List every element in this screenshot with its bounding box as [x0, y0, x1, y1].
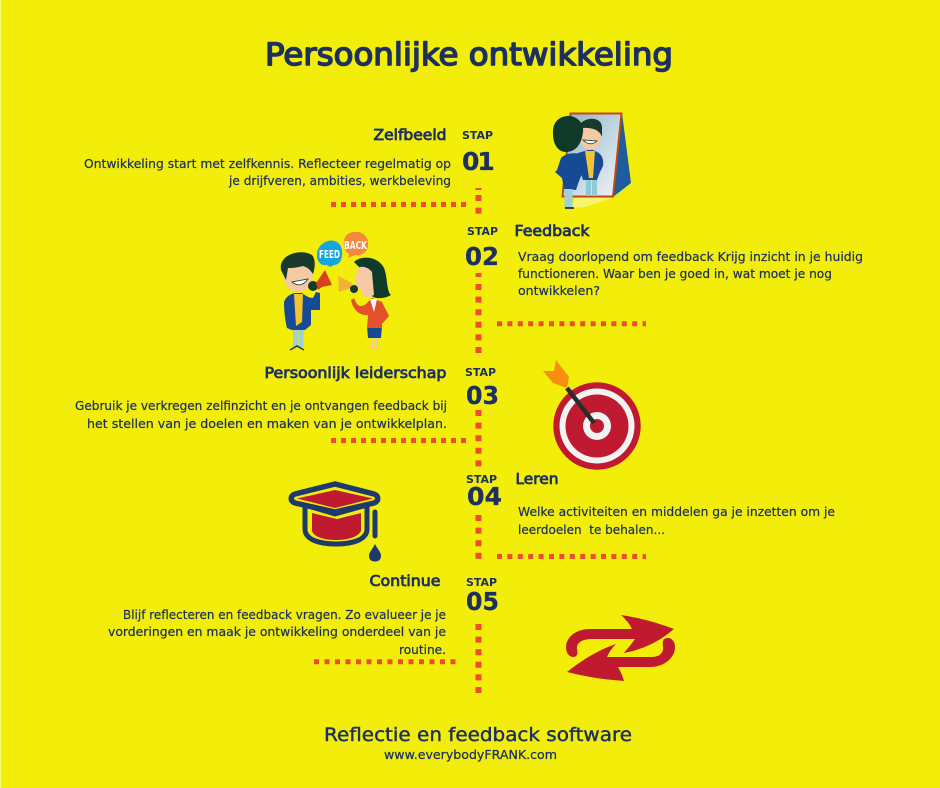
speech bubble: back: BACK	[344, 239, 367, 252]
step 4 connector	[497, 554, 646, 559]
step 1	[84, 126, 495, 204]
step 5 description: Blijf reflecteren en feedback vragen. Zo evalueer je je	[123, 608, 446, 623]
step 3 description	[75, 399, 447, 432]
step 3 description: het stellen van je doelen en maken van je ontwikkelplan.	[87, 417, 447, 432]
step 2 heading: Feedback	[514, 222, 590, 240]
step 1 label: STAP	[462, 129, 493, 142]
step 1 description: je drijfveren, ambities, werkbeleving	[228, 174, 451, 189]
icon: man at mirror	[553, 113, 631, 209]
step 4 heading: Leren	[516, 470, 558, 488]
footer tagline: Reflectie en feedback software	[324, 724, 632, 746]
step 3 label: STAP	[465, 366, 496, 379]
vertical timeline	[476, 188, 482, 694]
step 5 description: vorderingen en maak je ontwikkeling onderdeel van je	[108, 625, 446, 640]
step 2 description: Vraag doorlopend om feedback Krijg inzicht in je huidig	[518, 250, 863, 265]
step 2 description: ontwikkelen?	[518, 284, 600, 299]
title: Persoonlijke ontwikkeling	[265, 37, 673, 73]
step 4 description	[518, 505, 835, 538]
man	[281, 252, 332, 350]
woman	[338, 258, 391, 350]
step 4 description: Welke activiteiten en middelen ga je inzetten om je	[518, 505, 835, 520]
step 5 connector	[314, 659, 456, 664]
step 5	[108, 572, 499, 662]
step 3 heading: Persoonlijk leiderschap	[264, 364, 446, 382]
icon: two people with megaphones and speech bubbles	[281, 232, 391, 350]
step 1 number: 01	[462, 147, 495, 176]
step 3 connector	[331, 438, 466, 443]
step 2 description	[518, 250, 863, 299]
step 3 number: 03	[466, 381, 499, 410]
step 4 description: leerdoelen te behalen...	[518, 523, 665, 538]
step 1 heading: Zelfbeeld	[374, 126, 446, 144]
step 2 connector	[497, 321, 646, 326]
step 4 label: STAP	[466, 473, 497, 486]
step 1 description	[84, 157, 451, 189]
step 5 number: 05	[466, 587, 499, 616]
step 4 number: 04	[467, 482, 502, 511]
step 5 heading: Continue	[370, 572, 440, 590]
step 3 description: Gebruik je verkregen zelfinzicht en je ontvangen feedback bij	[75, 399, 447, 414]
footer website: www.everybodyFRANK.com	[384, 748, 557, 762]
step 1 connector	[331, 202, 466, 207]
icon: looping arrows	[566, 615, 675, 681]
step 4	[466, 470, 835, 556]
step 3	[75, 364, 499, 440]
icon: target with arrow	[543, 360, 641, 470]
step 2 description: functioneren. Waar ben je goed in, wat moet je nog	[518, 267, 832, 282]
step 5 description	[108, 608, 446, 658]
step 1 description: Ontwikkeling start met zelfkennis. Reflecteer regelmatig op	[84, 157, 451, 172]
icon: graduation cap	[291, 484, 381, 562]
step 5 description: routine.	[399, 643, 446, 658]
step 2	[465, 222, 863, 324]
step 2 label: STAP	[467, 225, 498, 238]
step 5 label: STAP	[466, 576, 497, 589]
step 2 number: 02	[465, 242, 499, 271]
speech bubble: feed: FEED	[319, 248, 340, 261]
